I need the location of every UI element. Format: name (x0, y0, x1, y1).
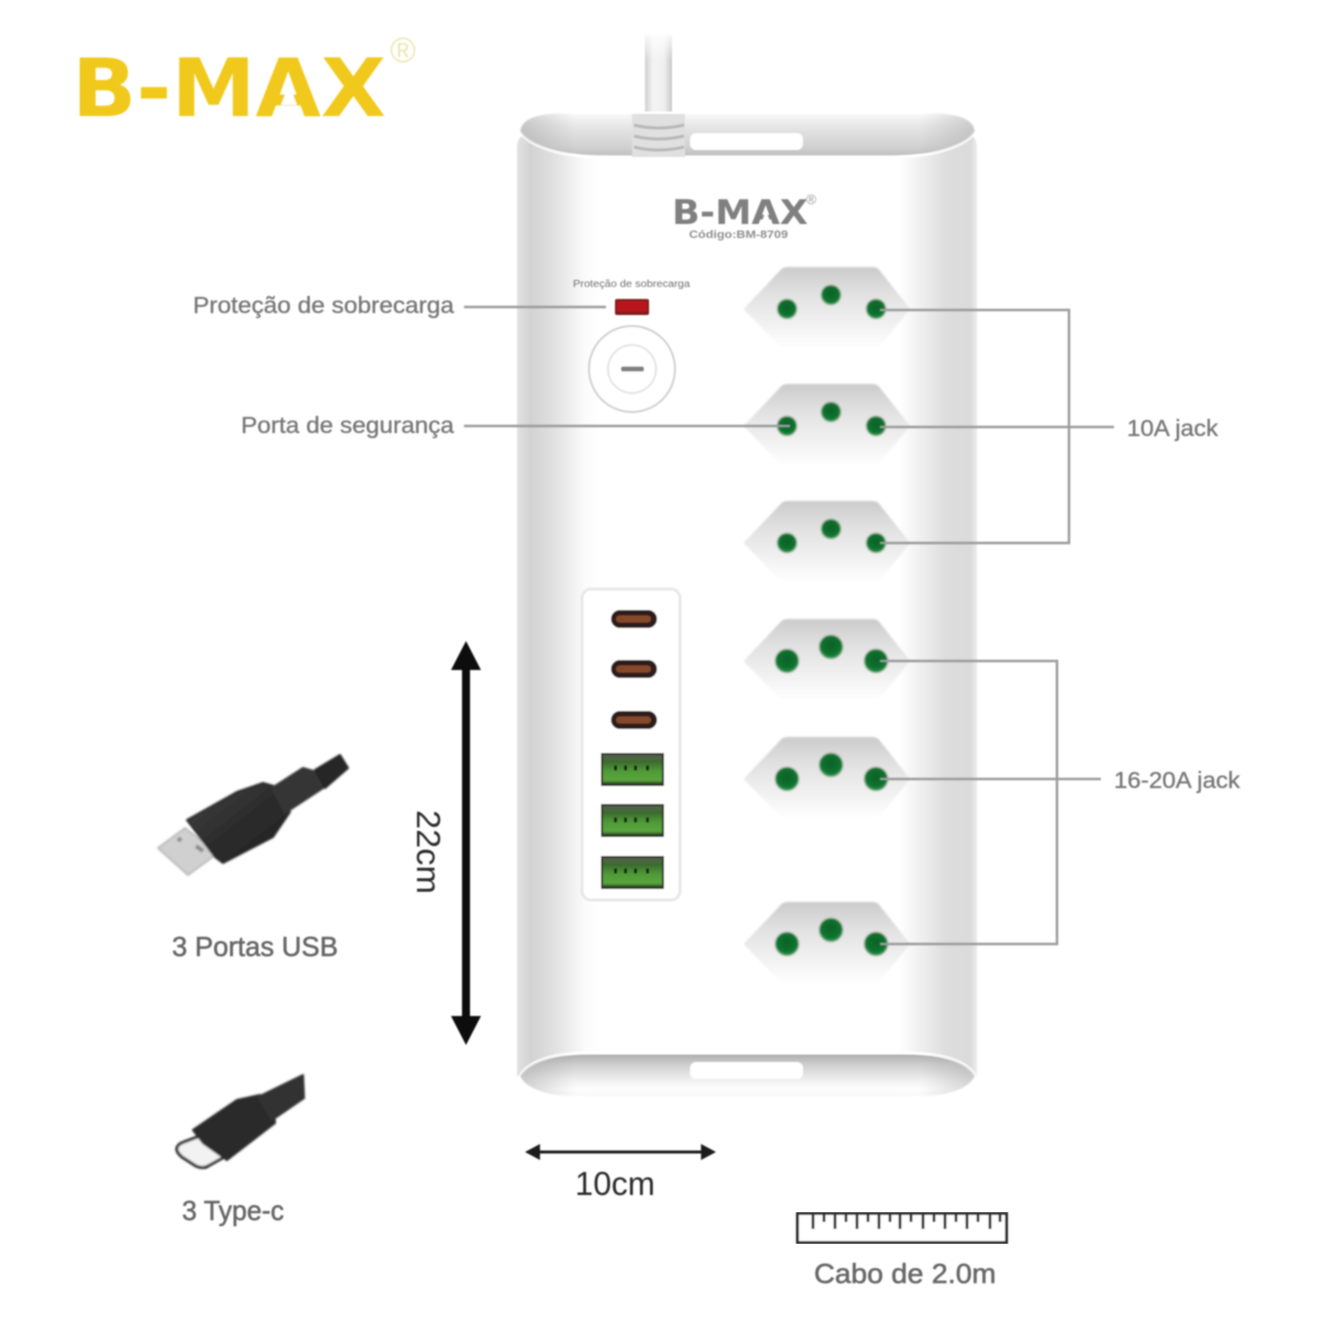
usb-a ports (602, 754, 663, 888)
type-c ports (611, 610, 657, 729)
overload label on device: Proteção de sobrecarga (573, 279, 690, 290)
socket 4 (745, 620, 909, 701)
logo A crossbar mask (281, 84, 297, 105)
power strip body (517, 113, 977, 1098)
device registered mark: ® (806, 191, 817, 207)
label: overload protection: Proteção de sobrecarga (193, 292, 454, 318)
socket 1 (745, 268, 909, 349)
USB port panel (582, 589, 680, 900)
label: 22cm: 22cm (410, 810, 447, 894)
label: 16-20A jack: 16-20A jack (1114, 767, 1241, 793)
product code: Código:BM-8709 (689, 229, 788, 241)
icon: USB-C plug (177, 1075, 304, 1168)
bottom opening (520, 1053, 975, 1098)
device logo: B-MAX (672, 193, 808, 233)
arrow: width dimension (525, 1144, 716, 1160)
power cable (640, 30, 677, 120)
label: safety door: Porta de segurança (241, 412, 454, 438)
registered mark: ® (390, 31, 416, 70)
callout lines (464, 307, 1114, 944)
icon: ruler (798, 1214, 1006, 1242)
icon: USB-A plug (158, 755, 348, 875)
top slot (690, 133, 803, 150)
device logo A crossbar mask (762, 211, 770, 220)
label: 10A jack: 10A jack (1127, 415, 1219, 441)
device logo (672, 191, 817, 241)
label: 3 USB ports: 3 Portas USB (172, 931, 338, 962)
label: 3 Type-c: 3 Type-c (182, 1195, 284, 1226)
label: cable length: Cabo de 2.0m (814, 1258, 996, 1289)
socket 2 (745, 385, 909, 466)
overload indicator LED (615, 299, 649, 315)
socket 5 (745, 738, 909, 819)
cable strain relief (632, 114, 685, 157)
label: 10cm: 10cm (575, 1165, 655, 1202)
top opening (520, 113, 975, 157)
bottom slot (690, 1062, 803, 1079)
socket 6 (745, 903, 909, 984)
power button (589, 326, 675, 412)
logo: B-MAX yellow: B-MAX (72, 42, 386, 135)
arrow: height dimension (451, 641, 481, 1045)
socket 3 (745, 502, 909, 583)
